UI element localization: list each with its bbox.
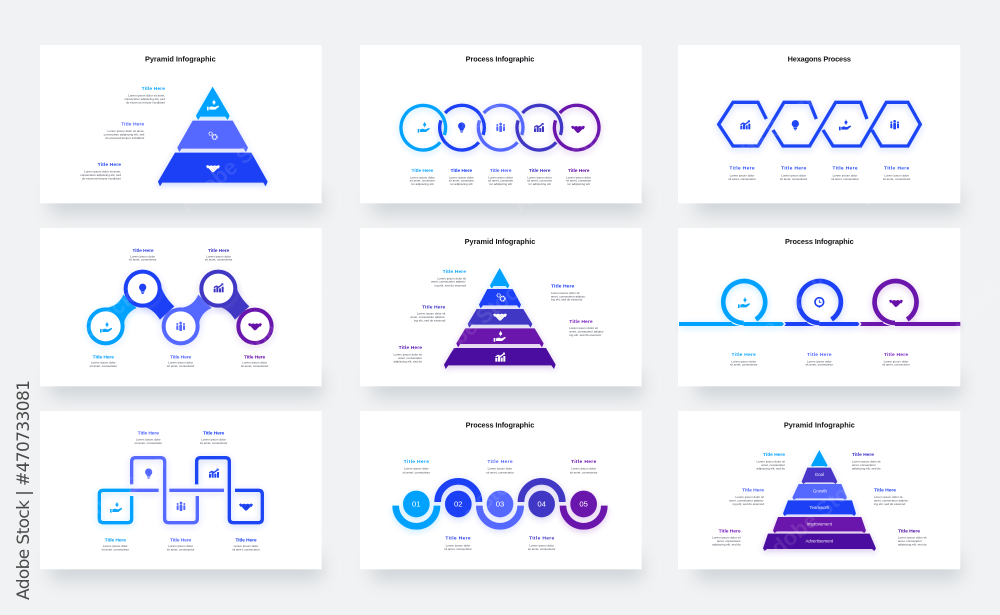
stock watermark overlay: Adobe Stock [387, 91, 507, 197]
text blocks under rings: Title Here [450, 168, 472, 174]
circle numbers: 05 [579, 500, 588, 509]
timeline step 3 [860, 281, 960, 326]
icon: people [496, 123, 505, 132]
text block: middle tier: Title Here [121, 121, 145, 127]
text blocks below: Title Here [445, 536, 471, 542]
left text blocks: Title Here [443, 269, 466, 275]
text blocks under hexagons: Lorem ipsum dolor [781, 173, 806, 177]
icon: handshake [239, 503, 253, 511]
right text blocks: ing elit, sed do eiusmod [551, 298, 583, 302]
left text blocks: ing elit, sed do eiusmod [414, 319, 446, 323]
text blocks under rings: tur adipiscing elit [568, 182, 590, 186]
heading: Process Infographic [466, 55, 534, 64]
pyramid tiers [158, 87, 268, 186]
text block: middle tier: Lorem ipsum dolor sit amet, [107, 129, 144, 133]
text blocks around nodes: Lorem ipsum dolor [206, 254, 231, 258]
panel: numbered wave process [360, 411, 642, 569]
text blocks above: sit amet, consectetur [486, 470, 514, 474]
text blocks: sit amet, consectetur [882, 363, 910, 367]
text blocks: Title Here [170, 537, 192, 543]
left text blocks: Title Here [719, 528, 741, 534]
connectors between nodes [106, 283, 249, 326]
text blocks [102, 431, 260, 552]
heading: Hexagons Process [788, 55, 851, 64]
left text blocks: amet, consectetur adipisc- [410, 315, 445, 319]
left text blocks: Title Here [763, 452, 785, 458]
text blocks under rings: Title Here [568, 168, 590, 174]
text blocks under rings: sit amet, consecter [527, 179, 552, 183]
text blocks: Lorem ipsum dolor [807, 359, 832, 363]
text blocks under hexagons: sit amet, consectetur [728, 177, 756, 181]
heading: Pyramid Infographic [145, 55, 216, 64]
text blocks: Title Here [807, 352, 832, 358]
text blocks under hexagons: sit amet, consectetur [883, 177, 910, 181]
text blocks around nodes: Title Here [244, 355, 266, 361]
icon: chart [534, 123, 544, 132]
tier labels: Improvement [807, 521, 833, 526]
right text blocks: amet, consectetur [898, 539, 922, 543]
text blocks under rings: tur adipiscing elit [529, 182, 551, 186]
icon: hand with coin [100, 322, 112, 333]
icon: handshake [493, 313, 507, 321]
icon: people [176, 322, 185, 331]
left text blocks: ing elit, sed do eiusmod [435, 283, 466, 287]
text blocks around nodes: sit amet, consectetur [241, 364, 268, 368]
left text blocks: adipiscing elit, sed do [756, 466, 785, 470]
heading: Process Infographic [466, 420, 534, 429]
text blocks above: Title Here [404, 459, 429, 465]
panel: five tier pyramid [360, 228, 642, 386]
text block: top tier [124, 86, 165, 104]
text blocks around nodes [90, 248, 268, 368]
text blocks under rings: Lorem ipsum dolor [410, 175, 435, 179]
icon: chart [214, 283, 224, 292]
text blocks under rings: sit amet, consecter [449, 179, 474, 183]
icon: bulb [458, 122, 465, 133]
icon: handshake [889, 300, 903, 307]
text block: bottom tier: consectetur adipiscing elit, sed [80, 173, 121, 177]
icon: chart [495, 353, 505, 362]
text blocks: Lorem ipsum dolor [731, 359, 756, 363]
text blocks below [444, 536, 555, 551]
right text blocks: Lorem ipsum dolor sit [852, 460, 881, 464]
text blocks around nodes: sit amet, consectetur [205, 258, 232, 262]
stock watermark overlay: Adobe Stock [174, 111, 293, 217]
stock watermark overlay: Adobe Stock [214, 274, 333, 380]
left text blocks: Lorem ipsum dolor sit [417, 312, 445, 316]
text blocks: sit amet, consectetur [232, 548, 260, 552]
text block: bottom tier: Lorem ipsum dolor sit amet, [84, 170, 121, 174]
icon: bulb [792, 120, 799, 130]
tier labels: Teamwork [809, 505, 830, 510]
text blocks: Title Here [105, 537, 126, 543]
text blocks below: Lorem ipsum dolor [529, 543, 554, 547]
text blocks: Title Here [235, 537, 257, 543]
left text blocks: ing elit, sed do eiusmod [733, 502, 764, 506]
left text blocks: adipiscing elit, sed do [712, 542, 741, 546]
icon: hand with coin [207, 100, 219, 110]
panel: process timeline with loops [678, 228, 960, 386]
numbered circles [403, 491, 597, 517]
text blocks: Lorem ipsum dolor [103, 544, 128, 548]
stock watermark overlay: Adobe Stock [414, 271, 533, 377]
text blocks: Title Here [203, 431, 225, 437]
text blocks under hexagons: sit amet, consectetur [780, 177, 807, 181]
text blocks below: Title Here [529, 536, 555, 542]
right text blocks [551, 283, 604, 337]
text blocks under hexagons: Lorem ipsum dolor [833, 173, 857, 177]
icon: hand with coin [110, 502, 122, 513]
tier labels [805, 472, 834, 544]
text blocks under hexagons: Title Here [884, 166, 910, 172]
left text blocks: amet, consectetur adipisc- [729, 498, 764, 502]
right text blocks: Lorem ipsum dolor sit [569, 326, 598, 330]
left text blocks: Title Here [422, 304, 446, 310]
text blocks under rings: Lorem ipsum dolor [449, 175, 474, 179]
text block: top tier: consectetur adipiscing elit, sed [124, 97, 165, 101]
icon: chart [740, 120, 750, 129]
heading: Pyramid Infographic [784, 420, 855, 429]
text blocks: sit amet, consectetur [167, 548, 194, 552]
text blocks below: sit amet, consectetur [444, 547, 472, 551]
text blocks under rings: sit amet, consecter [488, 179, 513, 183]
text blocks around nodes: Lorem ipsum dolor [91, 361, 116, 365]
icon: handshake [248, 323, 262, 330]
left text blocks: amet, consectetur adipisc- [431, 280, 466, 284]
text blocks around nodes: sit amet, consectetur [129, 258, 156, 262]
stock watermark overlay: Adobe Stock [854, 104, 973, 210]
text blocks above: Title Here [487, 459, 513, 465]
text block: bottom tier: Title Here [98, 162, 121, 168]
icon: clock [815, 298, 824, 308]
text block: top tier: Title Here [142, 86, 165, 92]
text blocks around nodes: Title Here [170, 355, 192, 361]
snake path [99, 458, 262, 523]
panel: process infographic with interlocked rings [360, 45, 642, 203]
icon: handshake [571, 126, 585, 133]
text blocks: sit amet, consectetur [806, 363, 833, 367]
text blocks: sit amet, consectetur [135, 441, 162, 445]
right text blocks: amet, consectetur [852, 463, 876, 467]
circle numbers [412, 500, 588, 509]
text blocks above: Lorem ipsum dolor [571, 467, 596, 471]
icon: handshake [206, 165, 220, 172]
text blocks around nodes: Title Here [132, 248, 154, 254]
text block: top tier: Lorem ipsum dolor sit amet, [128, 94, 165, 98]
text block: top tier: do eiusmod tempor incididunt [126, 100, 165, 104]
text blocks below: Lorem ipsum dolor [446, 543, 470, 547]
icon: hand with coin [418, 122, 430, 133]
text blocks under hexagons: Lorem ipsum dolor [884, 173, 909, 177]
left text blocks: adipiscing elit, sed do [393, 359, 422, 363]
text blocks under rings: Title Here [529, 168, 551, 174]
text blocks under rings: Title Here [490, 168, 512, 174]
icon: people [890, 120, 899, 129]
icon: gears [497, 294, 505, 301]
text blocks around nodes: Title Here [93, 355, 114, 361]
left text blocks: Lorem ipsum dolor sit [437, 276, 466, 280]
text blocks around nodes: sit amet, consectetur [90, 364, 117, 368]
circle numbers: 04 [537, 500, 547, 509]
left text blocks [393, 269, 466, 363]
text block: bottom tier [80, 162, 121, 180]
icon: bulb [139, 284, 146, 294]
text blocks: Title Here [138, 431, 159, 437]
stock watermark overlay: Adobe Stock [20, 284, 140, 390]
left text blocks [712, 452, 785, 546]
left text blocks: Lorem ipsum dolor sit [393, 353, 422, 357]
text blocks above [403, 459, 597, 474]
text blocks under rings: Lorem ipsum dolor [488, 175, 513, 179]
panel shadows [50, 190, 961, 580]
tier labels: Growth [813, 488, 828, 493]
text blocks: sit amet, consectetur [730, 363, 757, 367]
icon: hand with coin [738, 297, 750, 308]
right text blocks: Title Here [569, 319, 593, 325]
right text blocks: Title Here [898, 528, 920, 534]
stock id side label: Adobe Stock | #470733081 [14, 380, 34, 600]
text blocks around nodes: sit amet, consectetur [167, 364, 194, 368]
text blocks: sit amet, consectetur [102, 548, 129, 552]
text blocks under rings: tur adipiscing elit [490, 182, 512, 186]
stock watermark overlay: Adobe Stock [507, 111, 627, 217]
text blocks under rings: tur adipiscing elit [411, 182, 434, 186]
stock watermark overlay: Adobe Stock [714, 271, 833, 377]
stock watermark overlay: Adobe Stock [34, 88, 153, 194]
left text blocks: Title Here [742, 488, 764, 494]
text blocks under rings [410, 168, 591, 186]
pyramid tiers [444, 268, 556, 369]
text blocks around nodes: Title Here [208, 248, 230, 254]
stock watermark overlay: Adobe Stock [60, 441, 180, 547]
stock watermark overlay: Adobe Stock [414, 458, 533, 564]
icon: people [177, 502, 185, 511]
text blocks under hexagons: Lorem ipsum dolor [730, 173, 754, 177]
left text blocks: Lorem ipsum dolor sit [756, 460, 785, 464]
tier labels: Goal [815, 472, 824, 477]
text blocks above: Lorem ipsum dolor [488, 467, 512, 471]
text block: middle tier: consectetur adipiscing elit, sed [104, 132, 145, 136]
text blocks around nodes: Lorem ipsum dolor [130, 254, 155, 258]
right text blocks: adipiscing elit, sed do [852, 466, 881, 470]
icon: chart [209, 469, 219, 478]
text blocks [730, 352, 910, 367]
text blocks under hexagons: Title Here [729, 166, 755, 172]
text blocks under rings: Title Here [411, 168, 433, 174]
panel: labeled pyramid [678, 411, 960, 569]
text blocks around nodes: Lorem ipsum dolor [168, 361, 193, 365]
text blocks: Title Here [731, 352, 756, 358]
tier labels: Advertisement [805, 539, 834, 544]
right text blocks: ing elit, sed do eiusmod [569, 333, 601, 337]
right text blocks: Title Here [551, 283, 575, 289]
icon: gears [209, 132, 217, 139]
panel: square snake process [40, 411, 322, 569]
text blocks under rings: Lorem ipsum dolor [527, 175, 552, 179]
circle numbers: 02 [454, 500, 463, 509]
stock watermark overlay: Adobe Stock [704, 84, 823, 190]
right text blocks: adipiscing elit, sed do [898, 542, 927, 546]
text blocks under hexagons: sit amet, consectetur [831, 177, 859, 181]
pyramid tiers [763, 450, 876, 551]
text blocks under hexagons: Title Here [832, 166, 858, 172]
right text blocks [852, 452, 927, 546]
left text blocks: Lorem ipsum dolor sit [712, 536, 741, 540]
text blocks above: Lorem ipsum dolor [404, 467, 429, 471]
hexagon chain [719, 102, 920, 146]
text blocks under rings: tur adipiscing elit [450, 182, 473, 186]
icon: hand with coin [494, 331, 506, 342]
text blocks: Lorem ipsum dolor [136, 437, 161, 441]
left text blocks: amet, consectetur [398, 356, 422, 360]
left text blocks: amet, consectetur [717, 539, 741, 543]
heading: Process Infographic [785, 237, 854, 246]
panel: connected circle nodes [40, 228, 322, 386]
text blocks: sit amet, consectetur [200, 441, 227, 445]
right text blocks: ing elit, sed do eiusmod [874, 502, 906, 506]
text blocks: Lorem ipsum dolor [201, 437, 226, 441]
text blocks under rings: sit amet, consecter [410, 179, 435, 183]
text blocks below: sit amet, consectetur [528, 547, 555, 551]
right text blocks: Lorem ipsum dolor sit [551, 291, 580, 295]
right text blocks: amet, consectetur adipisc- [551, 294, 586, 298]
timeline step 2 [784, 281, 860, 326]
text blocks above: sit amet, consectetur [403, 470, 430, 474]
text blocks: Lorem ipsum dolor [168, 544, 193, 548]
right text blocks: Lorem ipsum dolor sit [898, 536, 927, 540]
right text blocks: Title Here [874, 488, 896, 494]
text blocks: Lorem ipsum dolor [234, 544, 258, 548]
wave arcs [396, 481, 604, 526]
text blocks under rings: Lorem ipsum dolor [566, 175, 591, 179]
timeline step 1 [679, 281, 784, 326]
text blocks above: sit amet, consectetur [570, 470, 597, 474]
text blocks under hexagons: Title Here [781, 166, 807, 172]
interlocked rings [401, 105, 599, 150]
heading: Pyramid Infographic [465, 237, 535, 246]
text blocks above: Title Here [571, 459, 597, 465]
right text blocks: Title Here [852, 452, 874, 458]
node rings [89, 272, 272, 343]
panel: hexagons process [678, 45, 960, 203]
text block: bottom tier: do eiusmod tempor incididunt [82, 176, 121, 180]
stock watermark overlay [20, 84, 1000, 570]
text block: middle tier: do eiusmod tempor incididunt [105, 136, 144, 140]
right text blocks: amet, consectetur adipisc- [874, 498, 909, 502]
left text blocks: amet, consectetur [761, 463, 785, 467]
icon: bulb [145, 468, 152, 479]
left text blocks: Lorem ipsum dolor sit [735, 495, 764, 499]
stock watermark overlay: Adobe Stock [754, 464, 873, 570]
text block: middle tier [104, 121, 145, 140]
text blocks: Lorem ipsum dolor [884, 359, 908, 363]
circle numbers: 01 [412, 500, 421, 509]
right text blocks: Lorem ipsum dolor sit [874, 495, 903, 499]
circle numbers: 03 [496, 500, 504, 509]
right text blocks: amet, consectetur adipisc- [569, 329, 604, 333]
text blocks under rings: sit amet, consecter [566, 179, 591, 183]
left text blocks: Title Here [399, 345, 422, 351]
text blocks under hexagons [728, 166, 910, 181]
text blocks: Title Here [884, 352, 908, 358]
icon: hand with coin [839, 120, 851, 130]
panel: pyramid infographic with three tiers [40, 45, 322, 203]
text blocks around nodes: Lorem ipsum dolor [242, 361, 267, 365]
